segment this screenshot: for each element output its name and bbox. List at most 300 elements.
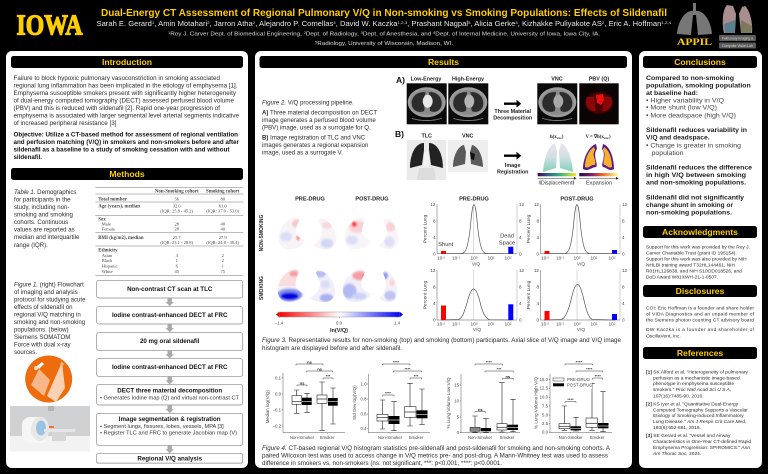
box plot: percent high V/Q [534, 360, 612, 440]
panel: conclusions and references [639, 51, 762, 468]
histogram: non-smoking pre-drug: 10 [452, 257, 457, 262]
text: objective: and perfusion matching (V/Q) in smokers and non-smokers before and after [14, 139, 240, 146]
flow step: non-contrast CT: Non-contrast CT scan at TLC [127, 286, 213, 293]
lung slice: smoking post left [342, 269, 371, 303]
box plot: percent high V/Q: **** [576, 360, 582, 364]
histogram: smoking pre-drug: 12 [430, 268, 436, 273]
text: conclusions: V/Q and deadspace. [646, 135, 710, 142]
authors: 1 [152, 20, 155, 25]
image: Siemens SOMATOM Force CT scanner [10, 406, 90, 451]
text: references: Am Thorac Soc, 2024. [652, 451, 701, 457]
text: introduction: of dual-energy computed tomography (DECT) assessed perfused blood volume [14, 98, 235, 104]
box plot: std dev log V/Q: 0.6 [361, 411, 367, 416]
box plot: percent low V/Q: 15 [454, 382, 460, 387]
caption: table 1: values are reported as [14, 227, 75, 234]
heading: Disclosures: Disclosures [676, 286, 725, 296]
histogram: non-smoking post-drug: 10 [608, 257, 614, 262]
table: demographics: White [102, 269, 113, 274]
heading: Acknowledgments: Acknowledgments [662, 227, 738, 237]
histogram: smoking pre-drug: 8 [433, 284, 436, 289]
flow step: image segmentation [97, 413, 243, 445]
affiliations: 1 [168, 31, 170, 35]
text: introduction: (PBV) and this is reduced with sildenafil [2]. Rapid one-year progression of [14, 105, 220, 112]
flow step: iodine DECT: Iodine contrast-enhanced DECT at FRC [112, 312, 228, 319]
box plot: median log V/Q: Smoker [320, 435, 335, 440]
lung slice: non-smoking post left [344, 217, 371, 250]
caption: figure 1: Siemens SOMATOM [14, 334, 70, 341]
affiliations: Radiology, University of Wisconsin, Madison, WI. [317, 41, 453, 47]
box plot: std dev log V/Q: Smoker [409, 435, 424, 440]
caption: figure 1: regional V/Q matching in [14, 311, 81, 318]
histogram: smoking post-drug: -2 [546, 322, 549, 326]
histogram: smoking post-drug: 10 [541, 323, 546, 328]
table: demographics: 2 [222, 258, 224, 263]
table: demographics: 1 [176, 258, 178, 263]
text: conclusions: population, smoking population [646, 83, 751, 90]
box plot: percent low V/Q: Non-Smoker [468, 435, 493, 440]
caption: figure 1: protocol for studying acute [14, 297, 86, 304]
histogram: non-smoking post-drug: 1 [596, 256, 598, 260]
histogram: non-smoking post-drug: Percent Lung [526, 214, 532, 243]
box plot: std dev log V/Q: **** [385, 390, 392, 396]
histogram: non-smoking pre-drug [422, 202, 525, 267]
table: demographics: 3 [176, 253, 179, 258]
label: three material decomposition [493, 109, 532, 122]
heading: Conclusions: Conclusions [674, 57, 726, 67]
equation label: expansion: vnc [604, 136, 609, 140]
caption: table 1: smoking and smoking [14, 212, 73, 219]
heading: Acknowledgments [643, 226, 757, 238]
affiliations: 4 [433, 31, 435, 35]
text: conclusions: • More shunt (low V/Q) [646, 105, 717, 112]
histogram: non-smoking post-drug: 2 [614, 256, 616, 260]
histogram: non-smoking post-drug: 12 [622, 202, 628, 207]
heading: Results: Results [428, 57, 459, 67]
table: demographics: Age (years), median [98, 204, 140, 210]
figure 3: axial V/Q slices: SMOKING [259, 276, 265, 300]
arrow [166, 406, 174, 413]
histogram: smoking pre-drug: 4 [519, 301, 522, 306]
box plot: percent low V/Q: ns [505, 374, 511, 379]
figure 2 row B: image registration: TLC [421, 134, 432, 140]
affiliations: 3 [361, 31, 363, 35]
text: disclosures [646, 306, 755, 339]
figure 2 row A: material decomposition: A) [396, 75, 405, 85]
histogram: smoking post-drug: Percent Lung [526, 280, 532, 309]
logo: Pulmonary Imaging and Computer Vision Lab: Computer Vision Lab [722, 44, 753, 48]
caption: figure 1: Figure 1. (right) Flowchart [14, 281, 84, 288]
figure 3: axial V/Q slices: PRE-DRUG [295, 196, 325, 202]
text: references: Characteristics in One-Year CT-defined Rapid [653, 439, 751, 445]
heading: Introduction: Introduction [102, 57, 152, 67]
image: VNC CT [537, 83, 577, 124]
equation label: expansion: ) [609, 135, 611, 140]
arrow [166, 377, 174, 384]
figure 2 row A: material decomposition: PBV (Q) [589, 76, 609, 82]
box plot: std dev log V/Q: 0.4 [361, 426, 367, 431]
text: references: Emphysema Progression: SPIROMICS." Ann [653, 445, 750, 451]
histogram: non-smoking post-drug: -1 [561, 256, 564, 260]
text: conclusions: • More deadspace (high V/Q) [646, 112, 736, 119]
colorbar: expansion [579, 173, 618, 187]
table: demographics: 27.9 [219, 235, 227, 240]
text: introduction [14, 75, 240, 127]
text: references [646, 369, 751, 457]
box plot: median log V/Q [265, 360, 345, 440]
flow step: iodine DECT second [97, 359, 243, 376]
text: acknowledgments: NHLBI training award T32HL144461, NIH [646, 262, 736, 268]
caption: figure 1: effects of sildenafil on [14, 304, 72, 311]
caption: table 1: range (IQR). [14, 242, 48, 249]
authors: , Jarron Atha [210, 21, 253, 28]
heading: Results [260, 56, 627, 68]
image: displacement field [543, 143, 573, 172]
box plot: percent low V/Q: **** [486, 360, 492, 364]
histogram: non-smoking pre-drug: 12 [430, 202, 436, 207]
box plot: percent high V/Q: 0.0 [542, 430, 549, 435]
panel: introduction and methods [6, 51, 248, 468]
authors: , Prashant Nagpal [407, 21, 469, 28]
box plot: percent low V/Q: Smoker [500, 435, 515, 440]
histogram: smoking pre-drug: 0 [519, 318, 522, 323]
lung slice: non-smoking pre left [278, 217, 305, 250]
box plot: percent high V/Q: 5.0 [542, 412, 549, 417]
image: low-energy CT [407, 83, 447, 124]
histogram: smoking post-drug: 10 [608, 323, 614, 328]
histogram: non-smoking pre-drug: 4 [519, 235, 522, 240]
histogram: smoking pre-drug: 0 [433, 318, 436, 323]
flow step: image segmentation: • Register TLC and FRC to generate Jacobian map (V) [100, 430, 237, 436]
histogram: smoking post-drug: 2 [614, 322, 616, 326]
heading: Disclosures [643, 285, 757, 297]
histogram: smoking post-drug: 10 [573, 323, 579, 328]
box plot: percent high V/Q: Smoker [590, 435, 605, 440]
box plot: percent high V/Q: % Lung Volume High V/Q [534, 377, 538, 429]
text: references: Computed Tomography Supports a Vascular [653, 407, 748, 413]
heading: Introduction [11, 56, 243, 68]
histogram: smoking post-drug: 1 [596, 322, 598, 326]
table: demographics: 45 [174, 269, 180, 274]
box plot: percent high V/Q: 10.0 [540, 395, 549, 400]
caption: table 1: Table 1. Demographics [14, 189, 76, 196]
box plot: median log V/Q: −0.2 [273, 423, 282, 428]
histogram: smoking pre-drug: V/Q [473, 327, 481, 333]
equation label: expansion: V = ∇h(x [585, 135, 604, 140]
caption: figure 4: difference in smokers vs. non-smokers (ns: not significant, ***: p<0.001, ****: p<0.0001. [262, 460, 502, 467]
arrow [504, 152, 521, 160]
logo: APPIL lungs [677, 3, 712, 48]
histogram: non-smoking post-drug: 10 [590, 257, 596, 262]
histogram: non-smoking post-drug: 0 [622, 251, 625, 256]
authors: 1,2,3 [397, 20, 408, 25]
affiliations: Roy J. Carver Dept. of Biomedical Engineering, [170, 32, 304, 38]
caption: figure 1: of imaging and analysis [14, 289, 78, 296]
histogram: smoking post-drug: 0 [579, 322, 581, 326]
authors: , Alejandro P. Comellas [255, 21, 334, 28]
text: acknowledgments: Support for this work was provided by the Roy J. [646, 244, 750, 250]
histogram: smoking post-drug: 0 [622, 318, 625, 323]
authors: 2 [253, 20, 256, 25]
histogram: non-smoking pre-drug: Dead [500, 234, 514, 240]
text: references: [1] SK Alford et al. "Heterogeneity of pulmonary [646, 369, 748, 375]
histogram: non-smoking pre-drug: 8 [519, 218, 522, 223]
text: conclusions: Sildenafil did not significantly [646, 194, 744, 201]
figure 3: axial V/Q slices: NON-SMOKING [259, 215, 265, 251]
histogram: non-smoking pre-drug: 10 [504, 257, 510, 262]
histogram: smoking pre-drug: -1 [457, 322, 460, 326]
figure 2 row A: material decomposition: VNC [551, 76, 563, 82]
histogram: non-smoking post-drug: 10 [556, 257, 561, 262]
text: references: perfusion as a mechanistic image-based [653, 375, 740, 381]
icon: dual x-ray source orange circle [25, 356, 72, 402]
histogram: smoking pre-drug: 10 [470, 323, 476, 328]
text: references: [2] KS Iyer et al. "Quantitative Dual-Energy [646, 401, 739, 407]
histogram: smoking post-drug: 8 [536, 284, 539, 289]
box plot: percent low V/Q: % Lung Volume Low V/Q [446, 377, 451, 429]
histogram: non-smoking pre-drug: 0 [433, 251, 436, 256]
box plot: percent high V/Q: 2.5 [542, 421, 549, 426]
text: objective: sildenafil as a baseline to a study of smoking cessation with and without [14, 147, 230, 154]
histogram: non-smoking pre-drug: 0 [476, 256, 478, 260]
caption: figure 4: Figure 4. CT-based regional V/Q histogram statistics pre-sildenafil and post-sildenafil for smoking and non-smoking cohorts. A [262, 445, 611, 452]
text: objective [14, 131, 240, 161]
box plot: median log V/Q: 0.0 [275, 391, 282, 396]
box plot: median log V/Q: 0.1 [275, 375, 282, 380]
text: references: [3] SE Gerard et al. "Vessel and Airway [646, 433, 731, 439]
flow step: iodine DECT second: Iodine contrast-enhanced DECT at FRC [112, 364, 228, 371]
figure 2 row B: image registration [395, 129, 618, 187]
histogram: smoking post-drug: V/Q [577, 327, 585, 333]
affiliations: 2 [304, 31, 306, 35]
caption: table 1: cohorts. Continuous [14, 219, 68, 226]
table: demographics: 80 [220, 196, 226, 201]
affiliations: Dept. of Internal Medicine, University of Iowa, Iowa City, IA. [435, 32, 600, 38]
box plot: percent low V/Q: 10 [454, 398, 460, 403]
text: objective: Objective: Utilize a CT-based method for assessment of regional ventilation [14, 131, 238, 138]
affiliations: Dept. of Anesthesia, and [363, 32, 433, 38]
logo: Pulmonary Imaging and Computer Vision Lab [719, 5, 756, 48]
box plot: percent high V/Q: **** [595, 374, 601, 378]
histogram: non-smoking pre-drug: -1 [457, 256, 460, 260]
flow step: DECT decomposition: • Generates Iodine map (Q) and virtual non-contrast CT [100, 396, 240, 402]
histogram: smoking post-drug: -1 [561, 322, 564, 326]
figure 3: axial V/Q slices: POST-DRUG [355, 196, 389, 202]
box plot: median log V/Q: ns [317, 366, 323, 372]
text: references: 193(6):652-661, 2016. [653, 425, 701, 431]
arrow [166, 446, 174, 453]
arrow [166, 324, 174, 332]
authors: 1,2,4 [661, 20, 672, 25]
histogram: non-smoking pre-drug: V/Q [472, 261, 480, 267]
histogram: smoking post-drug [526, 268, 628, 333]
figure 2 row A: material decomposition: High-Energy [452, 76, 484, 82]
label: image registration: Image [505, 163, 520, 169]
colorbar: ln(V/Q): ln(V/Q) [330, 328, 348, 334]
table: demographics: Ethnicity [98, 249, 118, 254]
logo: IOWA wordmark: IOWA [16, 11, 83, 42]
figure 2 row B: image registration: VNC [462, 134, 473, 140]
figure 2 row A: material decomposition [396, 75, 619, 124]
text: acknowledgments: Support for this work was also provided by NIH [646, 256, 747, 262]
flow step: image segmentation: • Segment lungs, fissures, lobes, vessels, MPA [3] [100, 424, 224, 430]
flow step: image segmentation: Image segmentation & registration [119, 416, 221, 423]
histogram: non-smoking post-drug: 0 [579, 256, 581, 260]
text: disclosures: COI: Eric Hoffman is a founder and share holder [646, 306, 754, 312]
label: three material decomposition: Three Material [494, 109, 531, 115]
box plot: std dev log V/Q: 0.8 [361, 396, 367, 401]
flowchart [97, 280, 243, 463]
box plot: percent low V/Q: 0 [457, 430, 460, 435]
text: disclosures: of VIDA Diagnostics and an unpaid member of [646, 312, 755, 318]
table: demographics: (IQR: 23.1 - 28.8) [160, 240, 194, 245]
histogram: smoking post-drug: 12 [534, 268, 539, 273]
histogram: non-smoking post-drug: 4 [622, 235, 625, 240]
caption: figure 1: sources. [14, 349, 37, 356]
text: conclusions: change shunt in smoking or [646, 202, 733, 209]
text: disclosures: the Siemens photon counting CT advisory board [646, 318, 754, 324]
histogram: smoking pre-drug: 8 [519, 284, 522, 289]
authors: 4 [515, 20, 519, 25]
figure 4: box plots [265, 360, 612, 440]
heading: Methods [11, 168, 243, 180]
colorbar: displacement: ‖Displacement‖ [539, 181, 575, 187]
box plot: median log V/Q: *** [326, 374, 331, 378]
box plot: median log V/Q: ns [307, 360, 313, 364]
histogram: non-smoking pre-drug: 10 [487, 257, 493, 262]
box plot: percent high V/Q: **** [586, 366, 593, 372]
table: demographics: (IQR: 25.8 - 45.2) [160, 209, 194, 214]
flow step: non-contrast CT [97, 280, 243, 298]
legend: PRE-DRUG [567, 377, 591, 382]
histogram: non-smoking post-drug: 10 [541, 257, 546, 262]
box plot: percent low V/Q: 5 [457, 414, 460, 419]
heading: Methods: Methods [109, 169, 145, 179]
histogram: smoking post-drug: 4 [622, 301, 625, 306]
equation label: displacement: ) [562, 135, 564, 140]
image: TLC coronal [407, 140, 446, 180]
label: three material decomposition: Decomposition [493, 116, 532, 122]
header [16, 3, 756, 48]
text: acknowledgments: DoD Award W81XWH-21-1-0507. [646, 274, 718, 280]
box plot: percent low V/Q [446, 360, 520, 440]
table: demographics: Hispanic [102, 264, 118, 268]
box plot: median log V/Q: ns [300, 380, 305, 386]
figure 3: axial V/Q slices [259, 196, 403, 334]
histogram: non-smoking pre-drug: 12 [519, 202, 525, 207]
caption: figure 4: paired Wilcoxon test was used to access change in V/Q metrics pre- and post-drug. A Mann-Whitney test was used to assess [262, 452, 608, 460]
caption: figure 2: (PBV) image, used as a surrogate for Q. [262, 125, 371, 132]
text: acknowledgments: Carver Charitable Trust (grant ID 195154). [646, 250, 737, 256]
caption: figure 2: image, used as a surrogate V. [262, 150, 343, 157]
box plot: percent high V/Q: 15.0 [540, 377, 549, 382]
table: demographics: 40 [220, 222, 226, 227]
lung slice: smoking pre left [277, 269, 305, 303]
histogram: non-smoking post-drug: V/Q [577, 261, 585, 267]
table: demographics: 1 [222, 264, 224, 268]
box plot: percent high V/Q: 12.5 [540, 386, 549, 391]
table: demographics: (IQR: 24.8 - 30.4) [206, 240, 240, 245]
text: conclusions: at baseline had: [646, 90, 698, 97]
histogram: non-smoking pre-drug: 4 [433, 235, 436, 240]
table: demographics: 56 [174, 196, 180, 201]
flow step: sildenafil [97, 333, 243, 350]
lung slice: smoking post right [380, 270, 398, 302]
text: conclusions: and non-smoking populations. [646, 180, 746, 187]
caption: figure 2: A) Three material decomposition on DECT [262, 109, 377, 116]
histogram: smoking post-drug: 0 [536, 318, 539, 323]
table: demographics: Female [102, 227, 115, 232]
histogram: non-smoking pre-drug: 8 [433, 218, 436, 223]
caption: figure 2: Figure 2. V/Q processing pipeline. [262, 99, 354, 106]
box plot: std dev log V/Q: **** [393, 360, 400, 364]
caption: figure 1 [14, 281, 86, 356]
text: conclusions: non-smoking populations. [646, 209, 732, 216]
caption: table 1: median and interquartile [14, 234, 80, 241]
table: demographics: 6 [176, 264, 179, 268]
colorbar: displacement [538, 173, 576, 187]
table: demographics: 75 [220, 269, 226, 274]
authors: 5 [468, 20, 471, 25]
box plot: percent high V/Q: **** [567, 397, 574, 402]
text: disclosures: DW Kaczka is a founder and shareholder of [646, 327, 755, 333]
authors: , Eric A. Hoffman [604, 21, 661, 28]
image: VNC coronal [448, 140, 488, 172]
histogram: non-smoking pre-drug: Shunt [438, 242, 454, 248]
arrow [504, 100, 521, 108]
text: conclusions: in high V/Q between smoking [646, 172, 746, 179]
logo: APPIL lungs: APPIL [677, 38, 712, 48]
image: expansion map [583, 144, 614, 170]
text: introduction: Failure to block hypoxic pulmonary vasoconstriction in smoking associated [14, 75, 220, 82]
histogram: non-smoking pre-drug: Space [499, 240, 515, 246]
authors: , Kizhakke Puliyakote AS [518, 21, 602, 28]
lung slice: smoking pre right [310, 270, 335, 302]
text: acknowledgments [646, 244, 750, 280]
label: image registration: Registration [497, 170, 528, 176]
table: demographics: 61.0 [219, 204, 227, 208]
table: demographics: Total number [98, 197, 128, 202]
histogram: non-smoking post-drug: 10 [573, 257, 579, 262]
histogram: smoking pre-drug [422, 268, 525, 333]
box plot: percent high V/Q: 7.5 [542, 403, 549, 408]
caption: figure 2: images generates a regional expansion [262, 142, 368, 149]
legend: POST-DRUG [567, 382, 593, 388]
histogram: non-smoking post-drug: 12 [534, 202, 539, 207]
arrow [166, 351, 174, 358]
table: demographics [95, 188, 243, 275]
colorbar: expansion: Expansion [586, 181, 612, 187]
caption: figure 2 [262, 99, 377, 157]
histogram: non-smoking pre-drug: 10 [470, 257, 476, 262]
text: conclusions: Sildenafil reduces variability in [646, 127, 747, 134]
text: references: Lung Disease." Am J Respir Crit Care Med, [653, 419, 746, 425]
table: demographics: Asian [102, 253, 113, 258]
box plot: std dev log V/Q: Std Dev log(V/Q) [352, 385, 357, 420]
colorbar: ln(V/Q): 0.0 [336, 320, 343, 325]
affiliations: 5 [315, 40, 317, 44]
caption: figure 3: histogram are displayed before and after sildenafil. [262, 345, 402, 352]
text: conclusions: Sildenafil reduces the difference [646, 164, 752, 171]
authors: Sarah E. Gerard [96, 21, 147, 28]
figure 2 row B: image registration: B) [395, 129, 404, 139]
table: demographics: Smoking cohort [206, 190, 240, 194]
affiliations: Dept. of Radiology, [306, 32, 361, 38]
flow step: iodine DECT [97, 307, 243, 324]
histogram: smoking pre-drug: 10 [504, 323, 510, 328]
figure 3: V/Q histograms [422, 196, 628, 333]
title: Dual-Energy CT Assessment of Regional Pulmonary V/Q in Non-smoking vs Smoking Populations: Effects of Sildenafil [101, 8, 667, 19]
box plot: percent low V/Q: ns [478, 407, 483, 412]
